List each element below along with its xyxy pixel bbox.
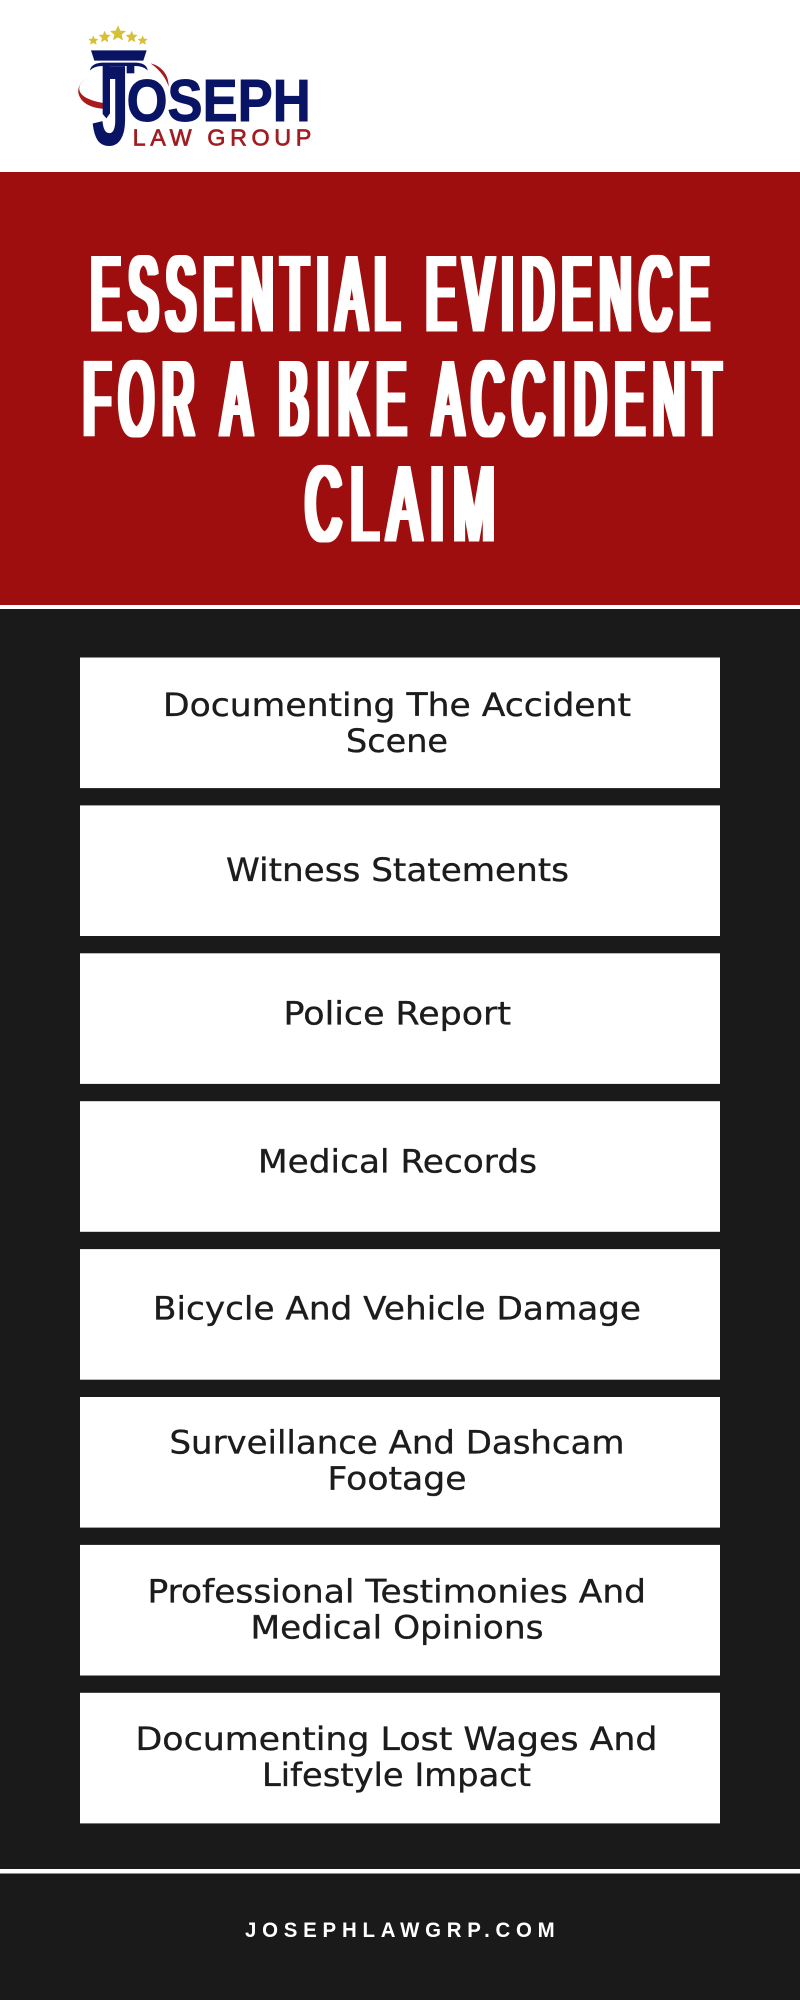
title text: CLAIM	[306, 444, 495, 564]
icon: red swoosh	[78, 63, 169, 109]
card: Documenting The Accident Scene: Documenting The Accident	[163, 686, 631, 724]
card: Witness Statements	[80, 805, 720, 936]
footer website: JOSEPHLAWGRP.COM	[245, 1919, 555, 1942]
card: Police Report: Police Report	[284, 994, 511, 1032]
card: Professional Testimonies And Medical Opinions	[80, 1545, 720, 1676]
card: Bicycle And Vehicle Damage: Bicycle And Vehicle Damage	[153, 1290, 641, 1328]
card: Police Report	[80, 953, 720, 1084]
title text: FOR A BIKE ACCIDENT	[84, 340, 721, 459]
card: Professional Testimonies And Medical Opinions: Medical Opinions	[250, 1608, 544, 1646]
card: Documenting Lost Wages And Lifestyle Impact: Documenting Lost Wages And	[136, 1720, 658, 1758]
card: Surveillance And Dashcam Footage: Footage	[328, 1460, 466, 1498]
title panel	[0, 172, 800, 605]
card: Medical Records: Medical Records	[258, 1142, 537, 1180]
header band with logo	[0, 0, 800, 172]
logo: Joseph Law Group	[78, 25, 311, 169]
card: Documenting Lost Wages And Lifestyle Impact	[80, 1693, 720, 1823]
logo tagline: LAW GROUP	[133, 125, 311, 151]
card: Surveillance And Dashcam Footage	[80, 1397, 720, 1528]
card: Surveillance And Dashcam Footage: Surveillance And Dashcam	[170, 1424, 624, 1462]
card: Documenting The Accident Scene	[80, 658, 720, 788]
card: Documenting The Accident Scene: Scene	[346, 722, 448, 760]
card: Medical Records	[80, 1101, 720, 1232]
card: Bicycle And Vehicle Damage	[80, 1249, 720, 1380]
title text: ESSENTIAL EVIDENCE	[91, 235, 709, 354]
card: Witness Statements: Witness Statements	[226, 851, 569, 889]
logo wordmark: OSEPH	[127, 67, 311, 134]
icon: pillar capital	[90, 50, 148, 118]
card: Professional Testimonies And Medical Opinions: Professional Testimonies And	[148, 1572, 646, 1610]
title text	[84, 235, 721, 564]
card: Documenting Lost Wages And Lifestyle Impact: Lifestyle Impact	[262, 1756, 531, 1794]
icon: five gold stars	[88, 25, 148, 45]
logo letter J: J	[92, 42, 130, 169]
